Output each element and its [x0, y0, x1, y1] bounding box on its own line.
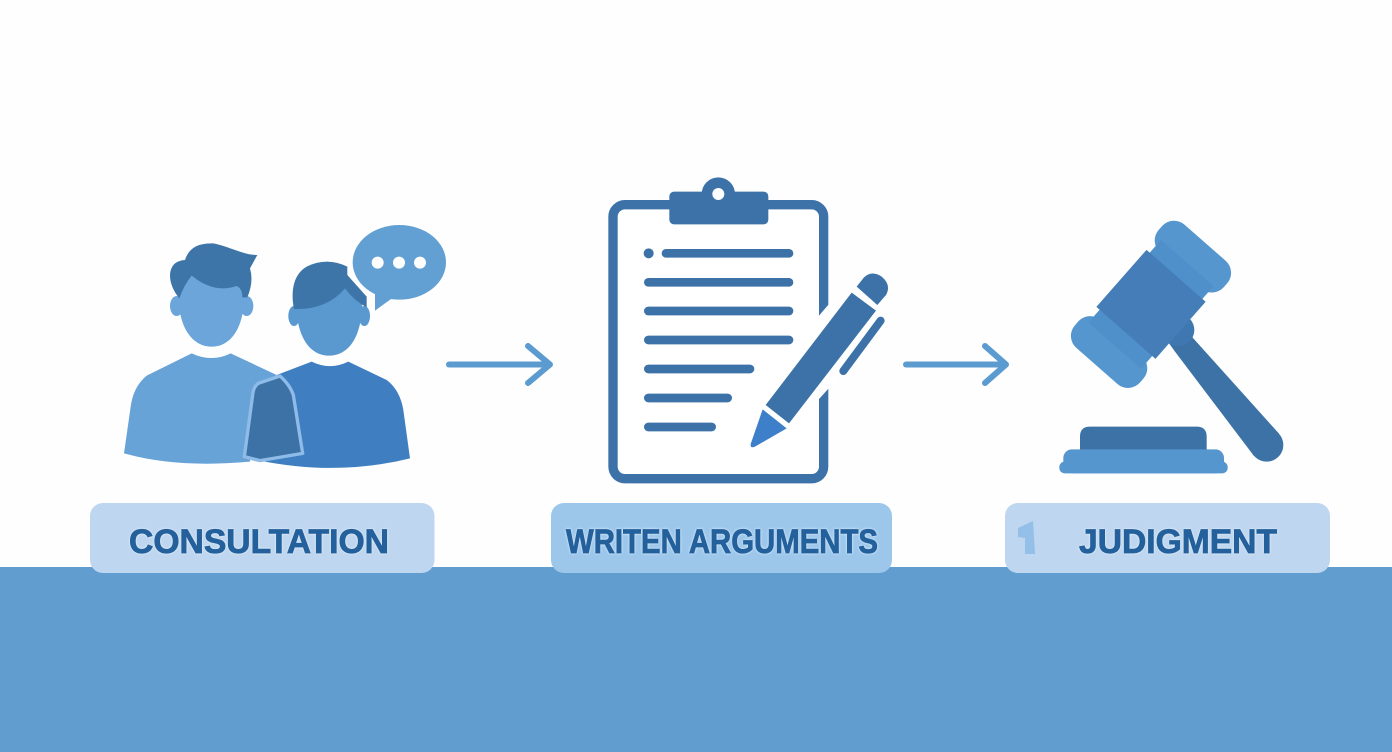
- arrow: consultation to written arguments: [449, 346, 550, 383]
- bottom band: [0, 567, 1392, 752]
- label: written arguments: [551, 503, 892, 573]
- label: judgment: [1005, 503, 1330, 573]
- label: consultation: [90, 503, 434, 573]
- clipboard clip: [669, 177, 768, 224]
- gavel sound block: [1059, 427, 1228, 473]
- pencil: [751, 273, 888, 447]
- gavel handle: [1167, 325, 1283, 462]
- icon: two people in consultation: [124, 225, 446, 468]
- gavel head: [1064, 214, 1238, 395]
- icon: clipboard with pencil: [613, 177, 888, 479]
- gavel collar: [1162, 314, 1194, 346]
- clipboard frame: [613, 205, 824, 479]
- right person body: [257, 362, 410, 468]
- right person head: [288, 262, 370, 356]
- arrow: written arguments to judgment: [906, 346, 1006, 383]
- overlap of the two bodies: [244, 376, 303, 461]
- label: judgment: JUDIGMENT: [1079, 523, 1277, 561]
- written text lines: [644, 248, 789, 427]
- label: written arguments: WRITEN ARGUMENTS: [566, 523, 878, 561]
- icon: gavel: [1059, 214, 1283, 473]
- left person body: [124, 353, 277, 464]
- speech bubble with dots: [353, 225, 446, 311]
- small glyph mark: [1018, 521, 1035, 554]
- label: consultation: CONSULTATION: [129, 523, 389, 561]
- left person head: [170, 243, 257, 347]
